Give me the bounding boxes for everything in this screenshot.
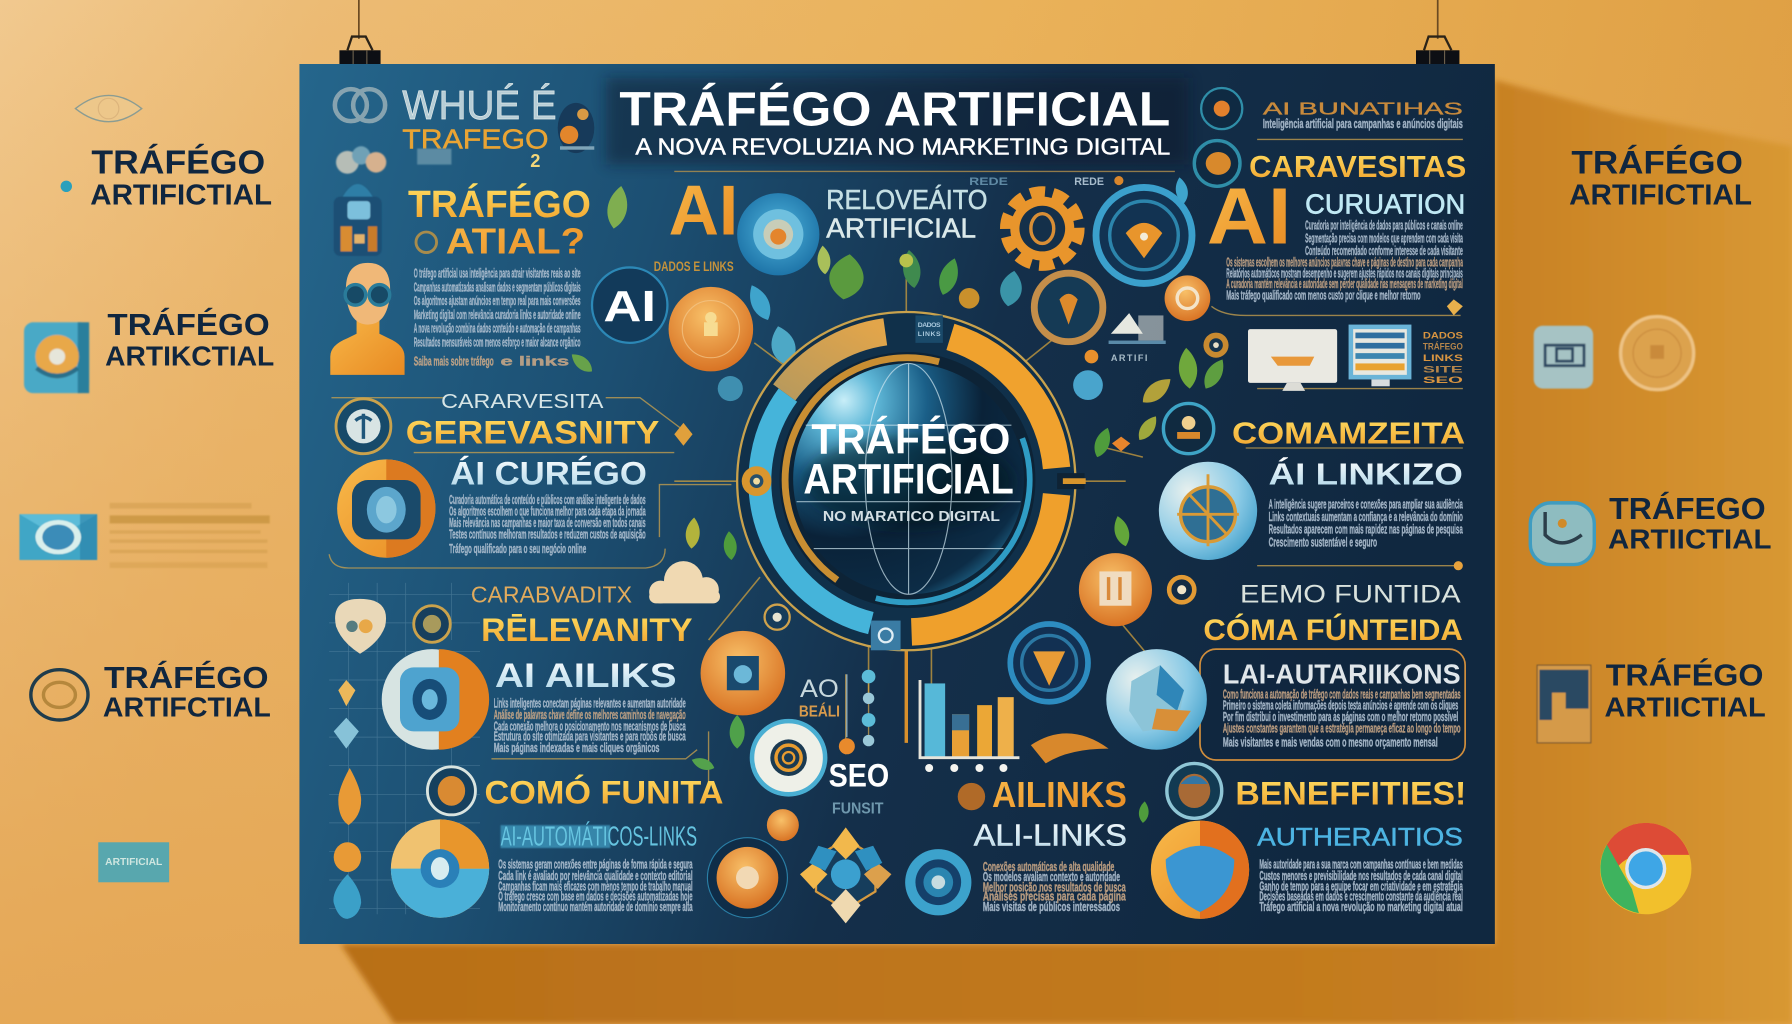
chart legend text	[1423, 330, 1463, 385]
heading: ai linkizo: ÁI LINKIZO	[1269, 457, 1463, 492]
icon: small coin	[767, 809, 799, 841]
icon: backpack illustration	[334, 184, 382, 256]
ring band: orange upper	[950, 337, 1057, 468]
icon: person bust	[330, 263, 405, 375]
text block: benefits: Tráfego artificial a nova revolução no marketing digital atual	[1259, 900, 1463, 914]
icon: ring left	[336, 399, 391, 454]
icon: light card	[1534, 326, 1593, 389]
icon: small ring	[414, 606, 450, 642]
infographic poster scene: Segmentação precisa com modelos que aprendem com cada visita	[1305, 231, 1463, 245]
heading: carabvaditx: CARABVADITX	[471, 581, 632, 607]
poster panel: Campanhas automatizadas analisam dados e segmentam públicos digitais	[414, 280, 581, 294]
label: trafego 5	[1608, 491, 1771, 555]
heading: whe e: WHUÉ É	[402, 82, 557, 128]
poster panel: Os algoritmos escolhem o que funciona melhor para cada etapa da jornada	[449, 504, 646, 518]
label: trafego 4: ARTIFICTIAL	[1569, 180, 1752, 212]
section: lower left: Os sistemas geram conexões entre páginas de forma rápida e segura	[498, 858, 693, 872]
label: beali: BEÁLI	[799, 702, 840, 721]
title dark backing	[606, 78, 1189, 165]
section: lower left: Análise de palavras chave define os melhores caminhos de navegação	[494, 708, 686, 722]
text block: curation: Mais tráfego qualificado com menos custo por clique e melhor retorno	[1226, 288, 1421, 302]
section: middle right: Resultados aparecem com mais rapidez nas páginas de pesquisa	[1269, 523, 1463, 537]
label: trafego 2	[105, 307, 274, 372]
globe title: TRÁFÉGO	[811, 416, 1010, 463]
callout box	[1200, 649, 1465, 760]
poster panel: Marketing digital com relevância curadoria links e autoridade online	[414, 308, 581, 322]
heading: ai ailiks: AI AILIKS	[495, 657, 677, 695]
icon: open book	[1109, 313, 1166, 363]
label: trafego 1	[90, 144, 272, 212]
icon: dotted chain	[839, 634, 906, 754]
icon: orange lens	[337, 459, 435, 558]
icon: small target	[1203, 333, 1229, 358]
question mark numeral: 2	[530, 150, 540, 171]
icon: teal tag: ARTIFICIAL	[105, 857, 162, 868]
icon: blue ring disc	[905, 849, 971, 915]
icon: orange disc	[1621, 317, 1694, 390]
heading: gerevasnity: GEREVASNITY	[406, 414, 659, 450]
subtitle: A NOVA REVOLUZIA NO MARKETING DIGITAL	[635, 133, 1170, 159]
section: lower left	[333, 561, 723, 919]
poster panel: Custos menores e previsibilidade nos resultados de cada canal digital	[1259, 869, 1463, 883]
section: top right	[1194, 88, 1466, 315]
icon: pin ring	[1201, 88, 1242, 129]
heading: relevanity: RĒLEVANITY	[481, 612, 693, 648]
poster panel: A inteligência sugere parceiros e conexões para ampliar sua audiência	[1269, 498, 1463, 512]
poster panel: Como funciona a automação de tráfego com dados reais e campanhas bem segmentadas	[1223, 687, 1461, 701]
top data block: DADOS	[918, 322, 941, 329]
icon: orange chip coin	[701, 631, 785, 715]
poster panel: Primeiro o sistema coleta informações depois testa anúncios e aprende com os cliques	[1223, 699, 1458, 713]
decorative leaves and small ornaments: REDE	[1074, 176, 1104, 188]
text block: ailinks: Mais visitas de públicos interessados	[983, 900, 1120, 914]
heading: ai bunatihas: AI BUNATIHAS	[1263, 98, 1463, 118]
label: trafego 3: ARTIFCTIAL	[103, 692, 271, 723]
heading: autheraitios: AUTHERAITIOS	[1257, 824, 1463, 852]
title: TRÁFÉGO ARTIFICIAL	[619, 83, 1170, 137]
icon: small ring funita	[427, 767, 475, 815]
label: trafego 4: TRÁFÉGO	[1571, 145, 1743, 181]
text block: intro: Saiba mais sobre tráfego	[414, 355, 494, 369]
icon: eye outline	[75, 95, 142, 122]
poster panel: Ajustes constantes garantem que a estratégia permaneça eficaz ao longo do tempo	[1223, 722, 1461, 736]
icon: teal dot	[61, 181, 72, 192]
icon: map pin disc	[1034, 273, 1103, 342]
icon: blue orange lens	[382, 649, 489, 750]
poster panel: Curadoria automática de conteúdo e públicos com análise inteligente de dados	[449, 493, 646, 507]
icon: infinity circles	[335, 89, 385, 121]
poster panel: Conteúdo recomendado conforme interesse de cada visitante	[1305, 244, 1463, 258]
poster panel: Mais relevância nas campanhas e maior taxa de conversão em todos canais	[449, 516, 646, 530]
outer thin ring	[737, 312, 1075, 650]
label: trafego 6: TRÁFÉGO	[1606, 658, 1763, 693]
text block: ailinks: Melhor posição nos resultados de busca	[983, 880, 1126, 894]
heading: como funita: COMÓ FUNITA	[485, 774, 723, 810]
icon: white monitor	[1248, 329, 1337, 391]
icon: envelope	[19, 514, 97, 560]
top data block: LINKS	[918, 331, 941, 338]
icon: pin bubble	[335, 599, 386, 654]
heading: curuation: CURUATION	[1305, 189, 1465, 220]
text block: curadoria: Tráfego qualificado para o seu negócio online	[449, 542, 586, 556]
chart legend text: SITE	[1423, 365, 1463, 375]
text block: links	[498, 858, 693, 914]
heading: coma funteida: CÓMA FÚNTEIDA	[1203, 613, 1463, 647]
label: trafego 5: ARTIICTIAL	[1608, 524, 1771, 555]
section: lower left: Campanhas ficam mais eficazes com menos tempo de trabalho manual	[498, 879, 693, 893]
poster panel	[299, 64, 1495, 944]
decorative connectors	[329, 139, 1463, 789]
label: ao: AO	[800, 675, 839, 703]
ring band: orange lower	[912, 494, 1057, 632]
section: middle right	[1106, 403, 1465, 760]
big AI: AI	[669, 171, 738, 250]
blurred text block	[110, 503, 270, 568]
text block: linkizo: Crescimento sustentável e seguro	[1269, 535, 1377, 549]
heading: trafego small: TRAFEGO	[402, 124, 549, 155]
badge: AI: AI	[603, 283, 656, 331]
inner rings	[779, 352, 1035, 608]
poster panel: Resultados mensuráveis com menos esforço e maior alcance orgânico	[414, 335, 581, 349]
label: trafego 4	[1569, 145, 1752, 212]
label: trafego 2: TRÁFÉGO	[107, 307, 270, 342]
label: trafego 2: ARTIKCTIAL	[105, 341, 274, 372]
top data block	[915, 315, 943, 343]
section: top center	[592, 171, 1463, 391]
heading: cararvesita: CARARVESITA	[441, 390, 604, 413]
icon: teal camera	[24, 322, 89, 393]
icon: target ring	[1169, 577, 1194, 602]
globe title second line: ARTIFICIAL	[803, 456, 1014, 503]
text block: ailinks: Conexões automáticas de alta qualidade	[983, 860, 1114, 874]
icon: gear	[1006, 192, 1079, 265]
heading: benefities: BENEFFITIES!	[1235, 776, 1466, 812]
icon: gold globe	[1159, 462, 1257, 560]
icon: cloud ornament	[336, 146, 451, 174]
icon: ring	[31, 670, 88, 720]
icon: open book: ARTIFI	[1111, 353, 1147, 363]
icon: hexagon cluster	[800, 827, 891, 923]
icon: curved swoosh	[1031, 733, 1109, 763]
poster panel: Mais autoridade para a sua marca com campanhas contínuas e bem medidas	[1259, 858, 1463, 872]
heading: trafego yellow: TRÁFÉGO	[408, 183, 591, 225]
section: lower left: Monitoramento contínuo mantém autoridade de domínio sempre alta	[498, 900, 693, 914]
globe subtitle: NO MARATICO DIGITAL	[823, 509, 1000, 525]
heading: atial: ATIAL?	[446, 221, 585, 262]
icon: stamp ring	[1163, 403, 1214, 454]
icon: spiral disc	[752, 721, 825, 794]
text block: curadoria	[449, 493, 646, 556]
left node	[742, 466, 771, 496]
decorative leaves and small ornaments: DADOS E LINKS	[654, 259, 734, 274]
label: funsit: FUNSIT	[832, 801, 884, 818]
hanging clips	[339, 0, 1459, 78]
text block: benefits: Ganho de tempo para a equipe focar em criatividade e em estratégia	[1259, 879, 1463, 893]
text block: ailinks: Análises precisas para cada página	[983, 890, 1126, 904]
poster panel: Testes contínuos melhoram resultados e reduzem custos de aquisição	[449, 527, 646, 541]
label: seo: SEO	[829, 757, 889, 793]
icon: teal tag	[98, 842, 169, 882]
icon: blue disc	[737, 193, 819, 275]
label: trafego 6: ARTIICTIAL	[1605, 692, 1766, 723]
infographic poster scene: Curadoria por inteligência de dados para públicos e canais online	[1305, 219, 1463, 233]
section: middle left	[336, 390, 659, 558]
heading: relovaito: RELOVEÁITO	[826, 184, 987, 215]
section: lower left: O tráfego cresce com base em dados e decisões automatizadas hoje	[498, 890, 693, 904]
right node	[1057, 473, 1086, 489]
chart legend text: TRÁFEGO	[1423, 342, 1463, 352]
icon: shield ring	[1010, 624, 1088, 702]
chart legend text: DADOS	[1423, 330, 1463, 340]
poster panel: Os algoritmos ajustam anúncios em tempo real para mais conversões	[414, 294, 581, 308]
strapline: Inteligência artificial para campanhas e anúncios digitais	[1263, 117, 1463, 131]
heading: lai autariikons: LAI-AUTARIIKONS	[1223, 658, 1461, 689]
icon: wifi ring	[1096, 187, 1192, 283]
icon: orange page coin	[1079, 553, 1152, 626]
ring band: blue	[760, 395, 871, 623]
label: trafego 6	[1605, 658, 1766, 723]
bar chart	[920, 680, 1019, 772]
icon: orange ring coin	[707, 838, 787, 918]
globe	[793, 363, 1024, 594]
icon: blue badge	[1530, 503, 1594, 565]
heading: ailinks: AILINKS	[992, 774, 1127, 815]
text block: ailinks: Os modelos avaliam contexto e autoridade	[983, 870, 1120, 884]
label: trafego 5: TRÁFEGO	[1609, 491, 1766, 526]
icon: sun lens	[391, 819, 489, 918]
icon: small ring	[416, 232, 437, 253]
text block: callout: Mais visitantes e mais vendas com o mesmo orçamento mensal	[1223, 735, 1438, 749]
poster panel: O tráfego artificial usa inteligência para atrair visitantes reais ao site	[414, 267, 581, 281]
text block: intro: e links	[501, 355, 569, 369]
heading: comaita: COMAMZEITA	[1232, 415, 1465, 450]
icon: archive box	[1537, 665, 1591, 743]
heading: artificial: ARTIFICIAL	[826, 213, 976, 244]
text block: benefits	[1259, 858, 1463, 914]
chart legend text: LINKS	[1423, 353, 1463, 363]
section: lower left: Cada link é avaliado por relevância qualidade e contexto editorial	[498, 869, 693, 883]
section: bottom right	[1151, 763, 1466, 919]
section: lower left: Estrutura do site otimizada para visitantes e para robôs de busca	[494, 730, 686, 744]
text block: intro	[414, 267, 581, 369]
label: trafego 3	[103, 660, 271, 723]
text block: callout	[1223, 687, 1461, 749]
right margin labels	[1530, 145, 1771, 914]
divider end dot	[1454, 561, 1463, 570]
text block: ailinks	[983, 860, 1126, 914]
label: trafego 1: ARTIFICTIAL	[90, 180, 272, 212]
icon: side pills	[333, 680, 361, 919]
label: trafego 1: TRÁFÉGO	[91, 144, 265, 182]
left margin labels	[19, 95, 274, 882]
ring band: tan	[784, 332, 885, 392]
faint grid	[329, 583, 480, 914]
icon: blue monitor	[1349, 325, 1411, 386]
section: lower left: Links inteligentes conectam páginas relevantes e aumentam autoridade	[494, 696, 686, 710]
text block: ailiks: Mais páginas indexadas e mais cliques orgânicos	[494, 741, 659, 755]
decorative leaves and small ornaments	[568, 176, 1229, 823]
heading: ali-links: ALI-LINKS	[974, 818, 1127, 853]
icon: small badge	[765, 605, 790, 630]
poster panel: Decisões baseadas em dados e crescimento constante da audiência real	[1259, 890, 1463, 904]
icon: browser logo	[1600, 823, 1691, 914]
text block: ailiks	[494, 696, 686, 755]
section: lower left: Cada conexão melhora o posicionamento nos mecanismos de busca	[494, 719, 686, 733]
icon: top ornament	[558, 103, 594, 153]
arrow	[1447, 299, 1463, 315]
poster panel: Links contextuais aumentam a confiança e a relevância do domínio	[1269, 510, 1463, 524]
big AI right: AI	[1207, 171, 1291, 260]
icon: at coin	[1165, 275, 1210, 321]
heading: ai curego: ÁI CURÉGO	[450, 456, 647, 492]
section: o que e	[330, 82, 594, 375]
heading: caravesitas: CARAVESITAS	[1249, 149, 1466, 184]
icon: small brown coin	[958, 783, 985, 810]
chart legend text: SEO	[1423, 375, 1463, 385]
heading: eemo funtida: EEMO FUNTIDA	[1240, 580, 1461, 608]
icon: bronze ring	[1194, 141, 1240, 186]
icon: shield disc	[1151, 821, 1249, 919]
icon: portrait ring	[1167, 763, 1222, 818]
text block: callout: Por fim distribui o investimento para as páginas com o melhor retorno possível	[1223, 710, 1458, 724]
heading: links: AI-AUTOMÁTICOS-LINKS	[501, 821, 697, 852]
icon: orange coin	[669, 287, 753, 371]
section: bottom center	[701, 553, 1152, 923]
poster panel: A nova revolução combina dados conteúdo e automação de campanhas	[414, 322, 581, 336]
badge: AI	[592, 267, 667, 343]
decorative leaves and small ornaments: REDE	[969, 176, 1008, 188]
text block: linkizo	[1269, 498, 1463, 549]
heading: links	[501, 821, 697, 852]
central ring emblem	[737, 312, 1086, 650]
label: trafego 3: TRÁFÉGO	[104, 660, 269, 695]
text block: curation	[1226, 219, 1463, 302]
bottom node	[871, 621, 901, 650]
icon: polygon globe	[1106, 649, 1207, 750]
icon: cloud	[649, 561, 720, 603]
